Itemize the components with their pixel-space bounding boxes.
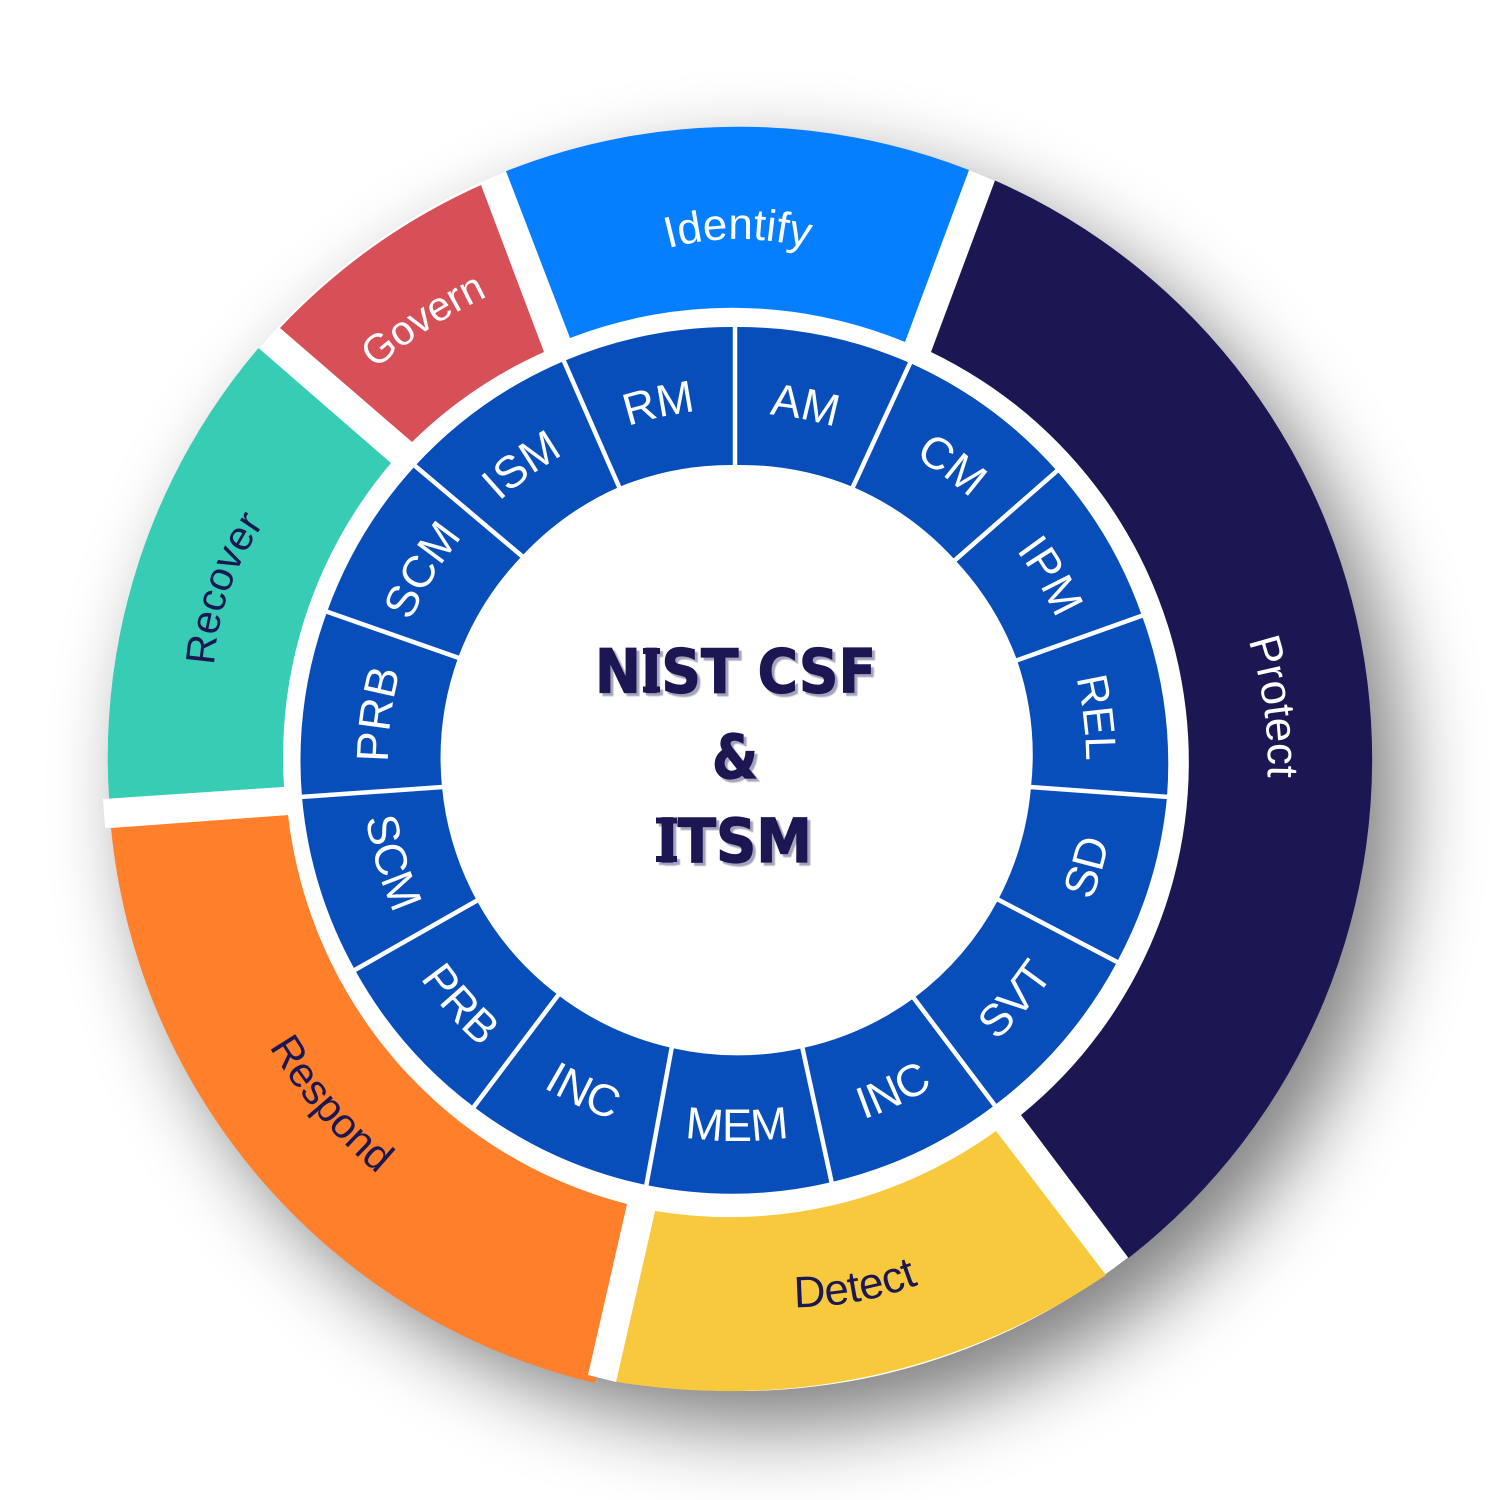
center title: & xyxy=(712,722,758,793)
inner segment: SVT xyxy=(916,902,1116,1104)
inner segment: ISM: ISM xyxy=(482,430,560,499)
outer segment: Govern xyxy=(280,185,544,442)
inner segment: IPM: IPM xyxy=(1018,535,1083,616)
inner segment: SD xyxy=(999,789,1167,960)
inner segment: REL: REL xyxy=(1077,676,1116,760)
center title: ITSM xyxy=(657,806,812,877)
inner segment: PRB lower: PRB xyxy=(422,962,496,1042)
inner segment: INC left xyxy=(476,996,670,1185)
center title xyxy=(595,636,876,877)
inner segment: INC right xyxy=(804,1000,993,1182)
outer segment: Respond xyxy=(111,815,627,1383)
center title: NIST CSF xyxy=(595,636,876,708)
inner segment: PRB lower xyxy=(356,902,556,1106)
inner segment: AM: AM xyxy=(770,385,839,426)
outer segment: Detect xyxy=(616,1131,1106,1392)
inner segment: ISM xyxy=(416,362,617,554)
outer segment: Protect: Protect xyxy=(1250,636,1296,778)
outer segment: Protect xyxy=(931,180,1372,1258)
inner segment: SVT: SVT xyxy=(980,957,1046,1036)
outer segment: Recover xyxy=(108,348,391,799)
inner segment: AM xyxy=(737,327,908,486)
outer segment: Govern: Govern xyxy=(364,280,486,363)
inner segment: PRB upper xyxy=(300,614,458,795)
inner segment: SCM lower: SCM xyxy=(368,816,422,910)
outer segment: Detect: Detect xyxy=(796,1260,918,1308)
inner segment: MEM: MEM xyxy=(688,1107,786,1141)
inner segment: SCM lower xyxy=(302,789,476,968)
outer segment: Identify: Identify xyxy=(664,208,814,254)
outer segment: Recover: Recover xyxy=(186,512,260,662)
inner segment: IPM xyxy=(956,472,1142,658)
inner segment: CM xyxy=(855,364,1056,558)
inner segment: REL xyxy=(1018,618,1168,795)
inner segment: INC left: INC xyxy=(546,1062,620,1116)
outer segment: Respond: Respond xyxy=(270,1034,396,1172)
inner segment: RM xyxy=(566,327,733,486)
wheel base xyxy=(108,127,1372,1391)
inner segment: MEM xyxy=(648,1048,830,1194)
inner segment: SD: SD xyxy=(1066,838,1106,896)
inner segment: RM: RM xyxy=(623,380,692,425)
drop shadow xyxy=(135,161,1401,1427)
outer segment: Identify xyxy=(506,126,969,342)
inner segment: SCM upper: SCM xyxy=(386,520,460,617)
inner segment: SCM upper xyxy=(328,468,520,656)
inner segment: PRB upper: PRB xyxy=(356,669,398,759)
inner segment: INC right: INC xyxy=(856,1064,928,1118)
inner segment: CM: CM xyxy=(922,437,988,496)
